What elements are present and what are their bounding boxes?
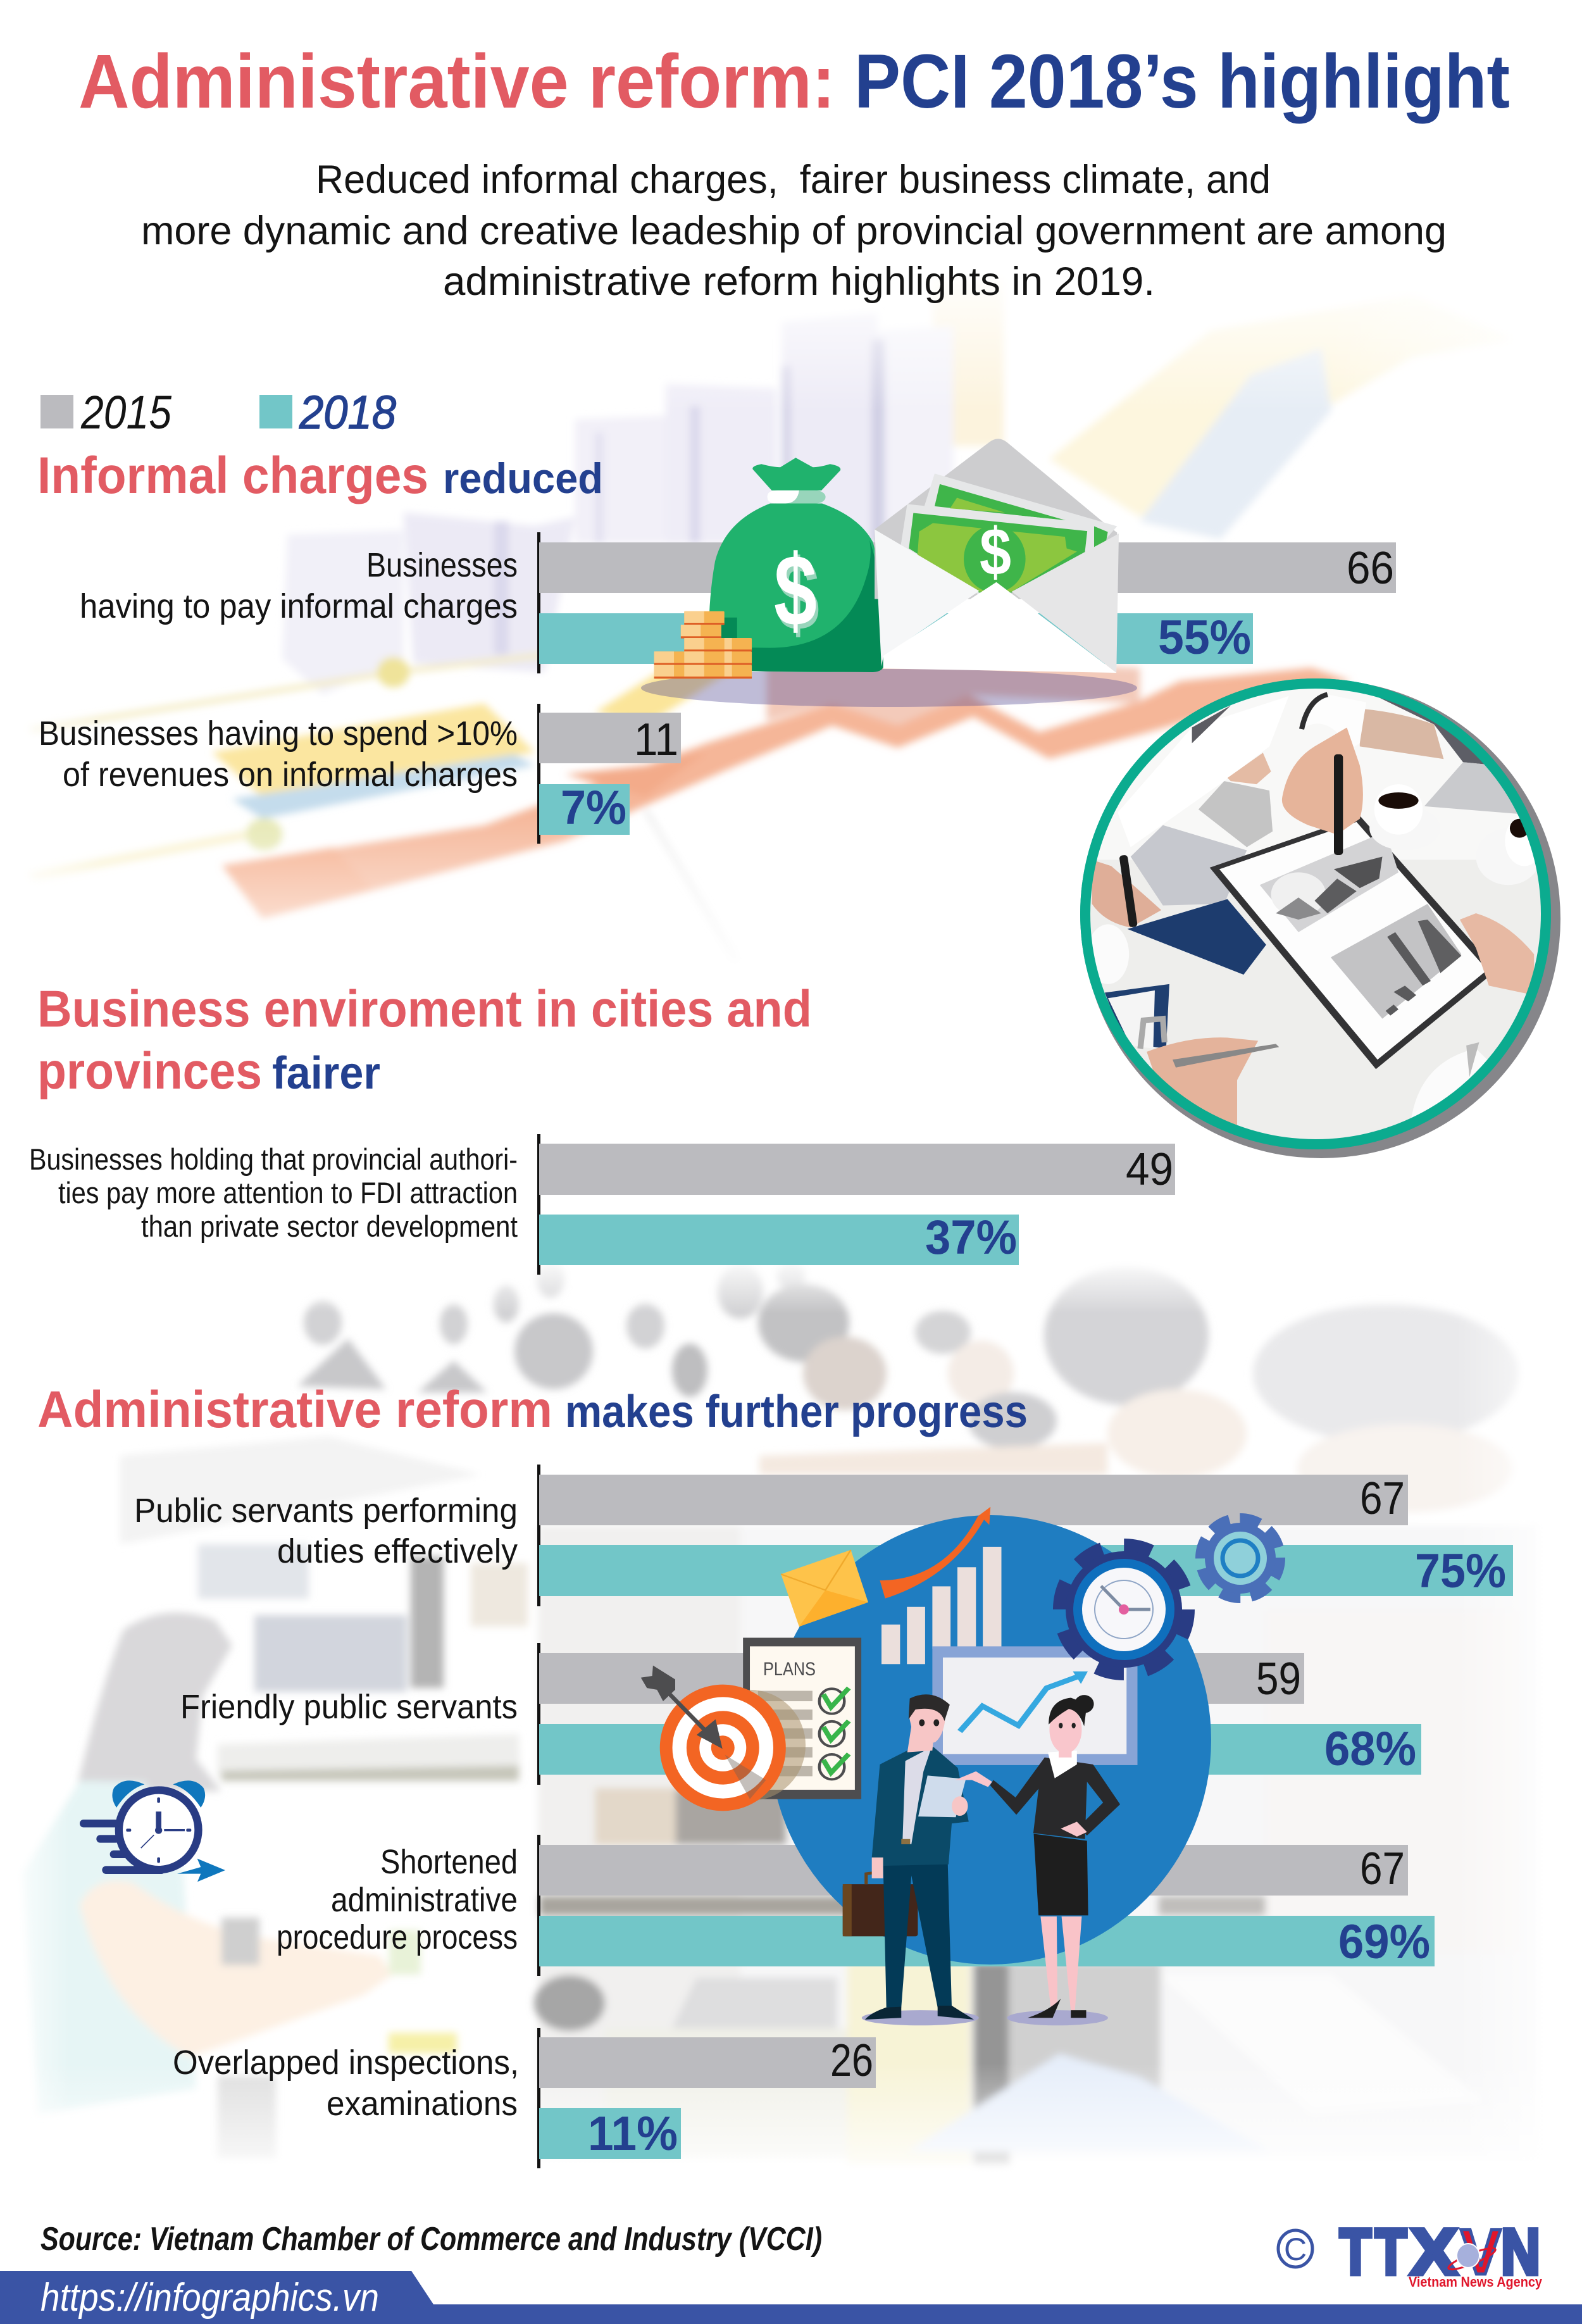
values: informal charges — [561, 543, 1394, 835]
heading: administrative reform progress — [37, 1381, 1028, 1439]
labels: businesses having to pay — [80, 546, 518, 625]
heading: informal charges reduced: Informal charges — [37, 447, 428, 504]
values: informal charges: 11 — [634, 715, 678, 765]
background: faded office photo — [0, 1256, 1582, 2190]
icon: blue gear — [1202, 1520, 1278, 1596]
heading: business environment fairer: fairer — [272, 1048, 380, 1099]
labels: administrative reform rows: Overlapped inspections, — [173, 2044, 519, 2082]
values: administrative reform: 75% — [1415, 1544, 1506, 1598]
values: informal charges: 7% — [561, 781, 626, 835]
chart board — [932, 1646, 1138, 1765]
labels: administrative reform rows: Shortened — [380, 1843, 518, 1881]
bar chart: informal charges — [537, 532, 1396, 844]
heading: business environment fairer — [37, 980, 812, 1100]
bar chart: business environment: 37% — [925, 1211, 1017, 1265]
photo circle: business meeting with charts — [1076, 671, 1582, 1165]
source note: Source: Vietnam Chamber of Commerce and Industry (VCCI) — [40, 2221, 822, 2258]
values: informal charges: 66 — [1347, 543, 1394, 594]
values: administrative reform — [588, 1473, 1506, 2161]
values: administrative reform: 67 — [1360, 1844, 1405, 1894]
title: PCI 2018’s highlight — [854, 38, 1510, 124]
heading: informal charges reduced: reduced — [443, 454, 603, 503]
logo: TTXVN: X — [1411, 2216, 1457, 2288]
values: administrative reform: 59 — [1256, 1654, 1301, 1704]
legend: 2018 — [299, 386, 396, 439]
heading: business environment fairer: Business enviroment in cities and — [37, 980, 812, 1038]
icon: fast clock — [80, 1780, 225, 1882]
target with arrow — [641, 1666, 806, 1811]
subtitle text block: more dynamic and creative leadeship of provincial government are among — [141, 209, 1447, 253]
bar chart: business environment — [537, 1134, 1175, 1275]
heading: administrative reform progress: makes further progress — [565, 1387, 1028, 1437]
labels: businesses having to pay: Businesses — [366, 546, 518, 584]
labels: FDI attraction: Businesses holding that provincial authori- — [29, 1142, 518, 1176]
legend: 2015 — [80, 386, 172, 439]
labels: administrative reform rows: administrative — [331, 1881, 518, 1919]
heading: administrative reform progress: Administrative reform — [37, 1381, 552, 1439]
subtitle text block: administrative reform highlights in 2019. — [443, 259, 1155, 304]
plans sheet — [743, 1638, 861, 1799]
icon: money bag, coins and envelope: $ — [776, 538, 819, 651]
values: administrative reform: 69% — [1338, 1915, 1430, 1969]
icon: gear with clock — [1063, 1549, 1185, 1670]
logo: TTXVN: V — [1461, 2216, 1501, 2288]
labels: businesses spending over 10% — [39, 715, 518, 794]
values: administrative reform: 67 — [1360, 1473, 1405, 1524]
title: Administrative reform: — [78, 38, 835, 124]
subtitle text block: Reduced informal charges, fairer business climate, and — [316, 158, 1271, 202]
icon: money bag, coins and envelope — [641, 439, 1137, 707]
labels: administrative reform rows: examinations — [327, 2085, 518, 2123]
values: informal charges: 55% — [1158, 611, 1251, 665]
logo: TTXVN: T — [1340, 2216, 1371, 2288]
labels: administrative reform rows: duties effectively — [277, 1532, 518, 1570]
logo: TTXVN: N — [1501, 2216, 1540, 2288]
shadows under figures — [862, 2010, 1108, 2025]
labels: FDI attraction — [29, 1142, 518, 1243]
logo: TTXVN: T — [1375, 2216, 1407, 2288]
text on sheet: plans: PLANS — [763, 1659, 816, 1680]
labels: FDI attraction: ties pay more attention to FDI attraction — [58, 1176, 518, 1209]
footer bar: https://infographics.vn — [40, 2276, 379, 2320]
logo: TTXVN — [1278, 2216, 1543, 2290]
bar chart: business environment: 49 — [1126, 1144, 1173, 1195]
labels: businesses spending over 10%: of revenues on informal charges — [63, 756, 518, 794]
subtitle text block — [141, 158, 1447, 304]
labels: FDI attraction: than private sector development — [141, 1209, 518, 1243]
legend — [40, 386, 396, 439]
footer bar — [0, 2271, 1582, 2324]
rising bars — [881, 1547, 1001, 1664]
background: faded chart photo — [0, 266, 1582, 1000]
values: administrative reform: 68% — [1324, 1722, 1416, 1776]
labels: businesses spending over 10%: Businesses having to spend >10% — [39, 715, 518, 753]
icon: money bag, coins and envelope: $ — [774, 534, 817, 647]
illustration: business people, plans and charts — [641, 1507, 1278, 2025]
bar chart: administrative reform — [537, 1465, 1513, 2168]
title — [78, 38, 1510, 124]
icon: envelope — [781, 1550, 868, 1627]
values: administrative reform: 11% — [588, 2107, 678, 2161]
labels: administrative reform rows — [134, 1492, 519, 2123]
values: administrative reform: 26 — [830, 2035, 873, 2086]
woman in black suit — [955, 1695, 1120, 2018]
labels: businesses having to pay: having to pay informal charges — [80, 587, 518, 625]
labels: administrative reform rows: Public servants performing — [134, 1492, 518, 1530]
man with briefcase — [843, 1694, 974, 2020]
labels: administrative reform rows: procedure process — [277, 1918, 518, 1956]
logo: TTXVN: Vietnam News Agency — [1409, 2274, 1543, 2290]
growth arrow — [880, 1507, 990, 1599]
logo: TTXVN: C — [1284, 2232, 1307, 2267]
heading: business environment fairer: provinces — [37, 1042, 262, 1100]
icon: money bag, coins and envelope: $ — [980, 515, 1011, 589]
labels: administrative reform rows: Friendly public servants — [180, 1688, 518, 1726]
